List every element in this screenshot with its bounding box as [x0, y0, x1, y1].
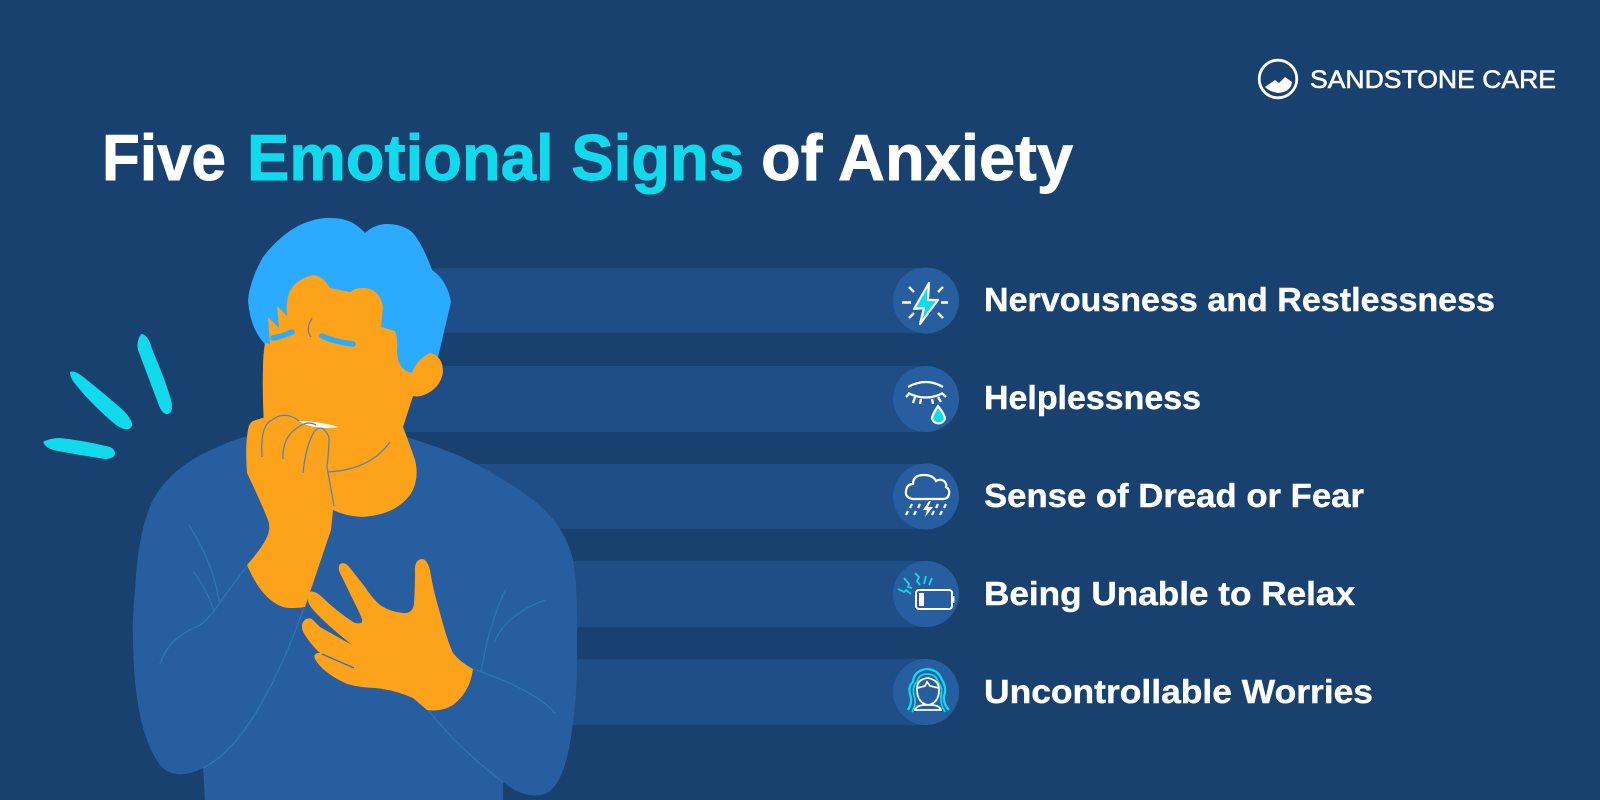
title: of Anxiety: [761, 121, 1073, 194]
row 3 bar: [400, 464, 926, 529]
row label 1: Nervousness and Restlessness: [984, 281, 1495, 318]
row 4 bar: [520, 561, 926, 627]
title: Five: [102, 121, 226, 194]
row label 4: Being Unable to Relax: [984, 575, 1356, 612]
icon: low battery: [893, 561, 959, 627]
row 5 bar: [520, 659, 926, 725]
icon: anxiety marks: [43, 334, 172, 459]
logo: Sandstone Care: SANDSTONE CARE: [1310, 66, 1556, 94]
icon: storm cloud: [893, 464, 959, 530]
icon: worried person: [893, 659, 959, 725]
row label 2: Helplessness: [984, 379, 1201, 416]
sweater fold lines: [160, 525, 555, 782]
row label 3: Sense of Dread or Fear: [984, 477, 1364, 514]
nose line: [308, 318, 312, 337]
chest hand finger line: [322, 654, 354, 668]
illustration: anxious man: [133, 218, 577, 800]
face, neck and ear: [263, 275, 443, 517]
icon: tearful eye: [893, 366, 959, 432]
raised hand and forearm: [246, 413, 333, 608]
finger and neck lines: [262, 415, 390, 506]
icon: lightning bolt: [893, 268, 959, 334]
row label 5: Uncontrollable Worries: [984, 673, 1373, 710]
eyebrows / closed eyes: [273, 332, 353, 344]
title: Emotional Signs: [247, 121, 744, 194]
bitten nail: [299, 421, 339, 428]
row 1 bar: [400, 268, 926, 333]
title: [102, 121, 1073, 194]
logo: Sandstone Care: [1259, 60, 1556, 98]
sweater: [133, 436, 577, 800]
hair: [248, 218, 451, 380]
row 2 bar: [400, 366, 926, 432]
chest hand: [302, 559, 473, 710]
